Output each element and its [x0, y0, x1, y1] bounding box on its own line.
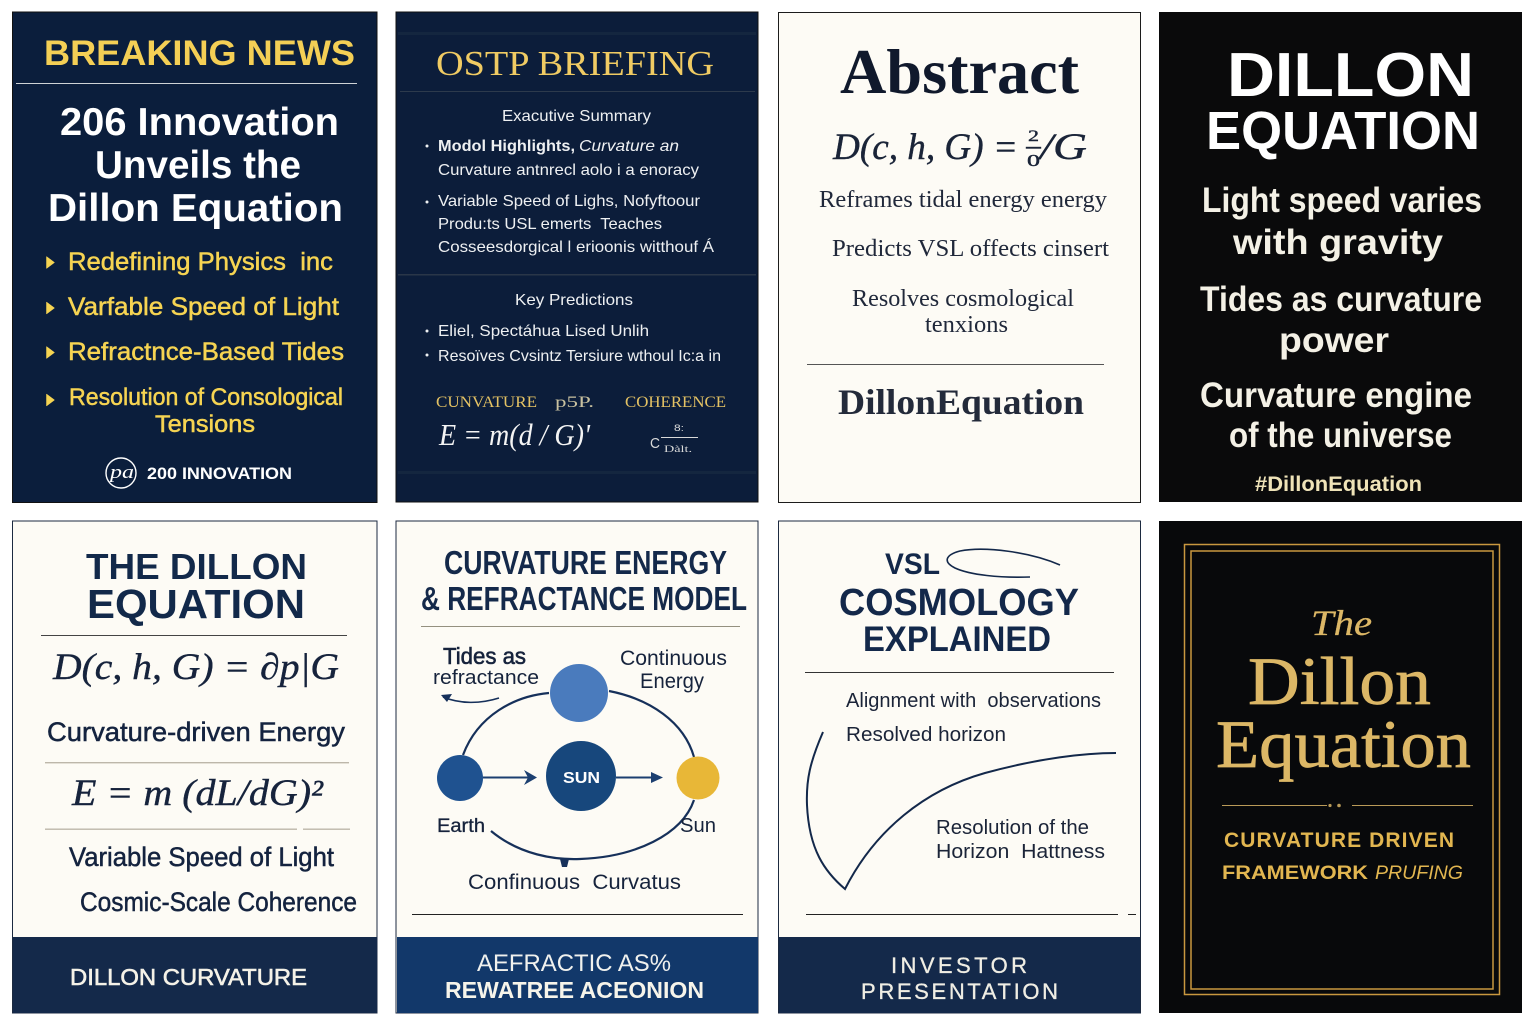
footer: investor presentation — [779, 937, 1140, 1013]
heading: THE DILLON — [86, 546, 307, 587]
logo: 200 innovation — [106, 458, 292, 488]
label: curvature driven energy: Curvature-driven Energy — [47, 717, 345, 747]
title: The — [1311, 603, 1372, 643]
formula: D(c, h, G) = — [832, 127, 1018, 168]
icon: refractance arrow — [441, 694, 499, 702]
heading: dillon equation: DILLON — [1227, 41, 1474, 110]
key statements: with gravity — [1232, 223, 1444, 262]
ornament — [1222, 804, 1473, 807]
feature lines: Variable Speed of Light — [69, 842, 334, 872]
formula: energy: E = m (dL/dG)² — [71, 773, 324, 814]
logo: 200 innovation: 200 INNOVATION — [147, 464, 292, 483]
key statements: power — [1279, 321, 1389, 360]
observations — [846, 690, 1101, 746]
heading: dillon equation — [1206, 41, 1480, 161]
subtitle: PRUFING — [1375, 863, 1463, 884]
planet: top — [550, 664, 608, 722]
key statements: of the universe — [1229, 416, 1452, 455]
planet: earth — [437, 755, 483, 801]
bullet list: Redefining Physics inc — [68, 248, 333, 276]
star: sun: SUN — [563, 770, 600, 787]
icon: swoosh — [947, 549, 1060, 577]
diagram labels: Confinuous Curvatus — [468, 871, 681, 894]
formula: coherence: Dàlt. — [664, 444, 692, 454]
heading — [421, 544, 747, 617]
gold frame — [1184, 544, 1500, 994]
bullet list: Refractnce-Based Tides — [68, 338, 344, 366]
star: sun — [546, 741, 616, 811]
footer: investor presentation: PRESENTATION — [861, 979, 1058, 1004]
executive summary: Cosseesdorgical l erioonis witthouf Á — [438, 237, 714, 256]
key statements: Curvature engine — [1200, 376, 1472, 415]
abstract points: Resolves cosmological — [852, 286, 1074, 312]
abstract points — [819, 187, 1109, 338]
feature lines — [69, 842, 357, 917]
key predictions: Eliel, Spectáhua Lised Unlih — [438, 323, 649, 340]
panel: book cover — [1159, 521, 1522, 1013]
formula: 0 — [1027, 151, 1040, 170]
diagram labels: refractance — [433, 667, 539, 689]
key statements — [1200, 181, 1482, 455]
executive summary: Exacutive Summary — [502, 108, 651, 125]
panel: vsl cosmology — [778, 521, 1140, 1013]
title: Dillon — [1248, 643, 1431, 719]
diagram labels: Continuous — [620, 647, 727, 670]
abstract points: Reframes tidal energy energy — [819, 187, 1107, 213]
executive summary: Variable Speed of Lighs, Nofyftoour — [438, 193, 701, 210]
heading: abstract: Abstract — [840, 36, 1080, 107]
formula: coherence: C — [650, 435, 660, 452]
diagram labels — [433, 643, 727, 894]
heading: CURVATURE ENERGY — [444, 544, 727, 581]
formula: coherence: 8: — [674, 423, 684, 433]
footer: refractance: AEFRACTIC AS% — [477, 950, 671, 977]
formula labels: p5P. — [555, 394, 594, 411]
panel: dillon equation social — [1159, 12, 1522, 502]
hashtag name: DillonEquation — [838, 382, 1084, 422]
formula: energy: E = m(d / G)' — [438, 417, 591, 452]
feature lines: Cosmic-Scale Coherence — [80, 887, 357, 917]
formula labels — [436, 394, 726, 411]
footer: refractance — [397, 937, 758, 1013]
footer: dillon curvature — [13, 937, 377, 1013]
key statements: Light speed varies — [1202, 181, 1482, 220]
formula labels: CUNVATURE — [436, 394, 537, 411]
executive summary — [426, 108, 714, 256]
diagram: orbit model — [437, 664, 720, 867]
heading — [86, 546, 307, 627]
executive summary: Curvature antnrecl aolo i a enoracy — [438, 162, 699, 179]
formula: coherence — [650, 423, 698, 454]
bullet list: Tensions — [155, 411, 255, 438]
chart: horizon curve — [807, 732, 1116, 889]
diagram labels: Tides as — [443, 643, 526, 669]
hashtag: #DillonEquation — [1255, 473, 1422, 496]
footer: refractance: REWATREE ACEONION — [445, 977, 704, 1003]
chart annotation — [936, 817, 1105, 863]
diagram labels: Energy — [640, 670, 704, 693]
heading: EQUATION — [87, 581, 305, 627]
subtitle — [1222, 829, 1463, 884]
bullet list — [46, 248, 344, 438]
formula labels: COHERENCE — [625, 394, 726, 411]
formula: dillon: D(c, h, G) = ∂p|G — [52, 647, 339, 688]
formula: 2 — [1028, 128, 1039, 145]
formula — [832, 127, 1087, 170]
diagram labels: Earth — [437, 816, 485, 837]
heading: VSL — [885, 548, 940, 581]
heading: COSMOLOGY — [839, 582, 1079, 624]
arrow: sun to yellow planet — [616, 772, 663, 783]
headline: Unveils the — [95, 144, 301, 187]
panel: breaking news — [12, 12, 377, 502]
heading: ostp briefing: OSTP BRIEFING — [436, 44, 714, 83]
planet: yellow sun — [676, 756, 720, 800]
headline: 206 Innovation — [60, 101, 339, 144]
chart annotation: Horizon Hattness — [936, 841, 1105, 863]
heading: & REFRACTANCE MODEL — [421, 580, 747, 617]
abstract points: tenxions — [925, 312, 1008, 338]
observations: Resolved horizon — [846, 724, 1006, 746]
key statements: Tides as curvature — [1200, 280, 1482, 319]
panel: abstract — [778, 12, 1140, 502]
observations: Alignment with observations — [846, 690, 1101, 712]
executive summary: Curvature an — [579, 138, 679, 155]
diagram labels: Sun — [680, 815, 716, 837]
heading: dillon equation: EQUATION — [1206, 101, 1480, 161]
footer: investor presentation: INVESTOR — [891, 953, 1027, 978]
panel: ostp briefing — [396, 12, 758, 502]
headline — [48, 101, 343, 230]
title: Equation — [1216, 706, 1471, 782]
bullet list: Resolution of Consological — [69, 384, 343, 411]
logo: 200 innovation: pa — [107, 462, 134, 483]
panel: the dillon equation — [12, 521, 377, 1013]
key predictions: Key Predictions — [515, 292, 633, 309]
heading — [839, 548, 1079, 659]
subtitle: FRAMEWORK — [1222, 863, 1368, 884]
executive summary: Modol Highlights, — [438, 138, 575, 155]
subtitle: CURVATURE DRIVEN — [1224, 829, 1454, 852]
key predictions: Resoïves Cvsintz Tersiure wthoul Ic:a in — [438, 348, 721, 365]
footer: dillon curvature: DILLON CURVATURE — [70, 964, 307, 990]
heading: EXPLAINED — [863, 620, 1051, 659]
chart annotation: Resolution of the — [936, 817, 1089, 839]
headline: Dillon Equation — [48, 187, 343, 230]
panel: curvature energy model — [396, 521, 758, 1013]
formula: /G — [1037, 127, 1087, 168]
heading: breaking news: BREAKING NEWS — [44, 34, 355, 73]
key predictions — [426, 292, 721, 365]
arrow: earth to sun — [483, 770, 537, 785]
abstract points: Predicts VSL offects cinsert — [832, 236, 1109, 262]
title — [1216, 603, 1471, 782]
executive summary: Produ:ts USL emerts Teaches — [438, 216, 662, 233]
bullet list: Varfable Speed of Light — [68, 293, 339, 321]
